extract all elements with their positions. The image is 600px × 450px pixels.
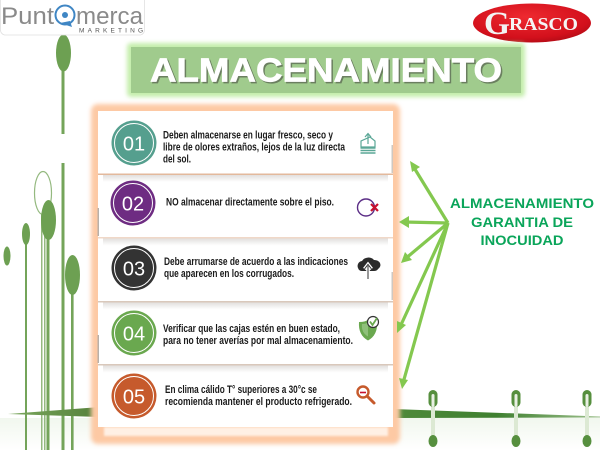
step 02: 02	[122, 194, 144, 216]
icon: cloud with arrow	[358, 258, 380, 279]
step 03	[112, 246, 380, 290]
caption: INOCUIDAD	[480, 232, 564, 248]
spiral rings	[428, 390, 592, 447]
step 04: 04	[123, 324, 145, 346]
logo: Grasco	[473, 4, 591, 42]
row dividers and shadows	[98, 145, 393, 372]
step 05: En clima cálido T° superiores a 30°c se	[165, 384, 317, 396]
step 05: recomienda mantener el producto refrigerado.	[165, 396, 352, 408]
caption: GARANTIA DE	[471, 214, 573, 230]
arrows: from caption to steps	[397, 161, 448, 389]
title banner	[127, 43, 525, 97]
title banner: ALMACENAMIENTO	[150, 52, 502, 90]
logo: Punto Merca Marketing: MARKETING	[79, 28, 143, 34]
step 04	[112, 310, 378, 356]
ground shading	[0, 418, 600, 450]
step 01: del sol.	[163, 154, 191, 166]
step 02: NO almacenar directamente sobre el piso.	[166, 196, 334, 208]
step 01: Deben almacenarse en lugar fresco, seco y	[163, 130, 333, 142]
step 01: 01	[123, 134, 145, 156]
step 03: Debe arrumarse de acuerdo a las indicaciones	[164, 256, 348, 268]
step 03: 03	[123, 258, 145, 280]
logo: Punto Merca Marketing	[0, 0, 144, 35]
title banner: ALMACENAMIENTO	[152, 54, 504, 91]
step 02	[110, 180, 378, 226]
step 05: 05	[123, 386, 145, 408]
ground line	[8, 407, 600, 418]
decorative plants	[4, 34, 80, 450]
icon: shield with check	[359, 316, 378, 340]
caption	[450, 195, 594, 248]
step 04: para no tener averías por mal almacenamiento.	[163, 335, 353, 347]
step 05	[112, 374, 374, 418]
caption: ALMACENAMIENTO	[450, 195, 594, 211]
step 03: que aparecen en los corrugados.	[164, 268, 294, 280]
icon: magnifier	[358, 386, 374, 403]
icon: circle with red cross	[358, 199, 378, 216]
step 01	[112, 120, 376, 166]
panel: storage steps	[91, 104, 400, 444]
logo: Grasco: RASCO	[509, 14, 578, 34]
icon: box with upward arrow	[360, 134, 376, 153]
logo: Punto Merca Marketing: Punt	[1, 3, 54, 30]
logo: Grasco: G	[484, 6, 510, 42]
logo: Punto Merca Marketing: merca	[76, 3, 144, 30]
step 04: Verificar que las cajas estén en buen estado,	[163, 323, 340, 335]
step 01: libre de olores extraños, lejos de la luz directa	[163, 142, 346, 154]
